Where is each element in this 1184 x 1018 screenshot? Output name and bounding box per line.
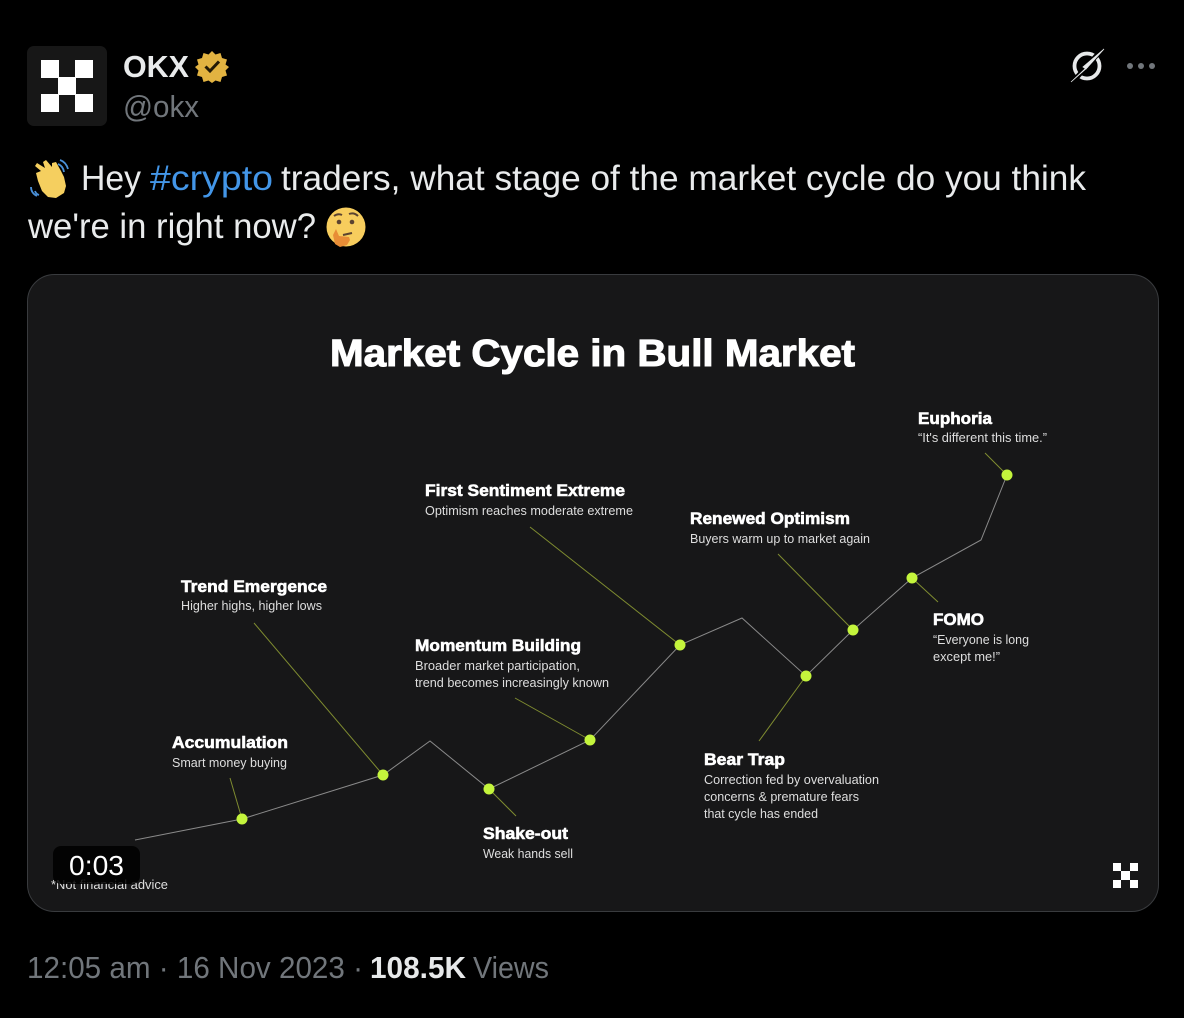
post metadata: 108.5K	[370, 950, 467, 985]
label: Euphoria: “It's different this time.”	[918, 431, 1047, 445]
label: FOMO: except me!”	[933, 650, 1000, 664]
video timer	[53, 846, 140, 884]
disclaimer: *Not financial advice	[51, 878, 168, 892]
line chart: market cycle	[135, 453, 1012, 840]
video timer: 0:03	[69, 850, 124, 881]
label: Renewed Optimism	[690, 509, 870, 546]
account name: OKX	[123, 49, 189, 84]
post text: #crypto	[150, 159, 273, 198]
label: Accumulation: Accumulation	[172, 733, 288, 752]
video panel	[28, 274, 1158, 912]
post text: traders, what stage of the market cycle do you think	[281, 159, 1086, 198]
icon: gold verified badge	[195, 51, 229, 83]
post metadata: 12:05 am · 16 Nov 2023 ·	[27, 950, 363, 985]
label: Bear Trap: Bear Trap	[704, 750, 785, 769]
post text	[27, 159, 1086, 247]
label: Bear Trap: concerns & premature fears	[704, 790, 859, 804]
label: FOMO: FOMO	[933, 610, 984, 629]
data points	[236, 470, 1012, 824]
label: Shake-out	[483, 824, 573, 861]
label: Shake-out: Shake-out	[483, 824, 568, 843]
title: Market Cycle in Bull Market	[330, 333, 855, 375]
label: FOMO: “Everyone is long	[933, 633, 1029, 647]
label: Euphoria	[918, 409, 1047, 445]
label: Momentum Building: Broader market participation,	[415, 659, 580, 673]
leader lines	[230, 453, 1007, 819]
label: Bear Trap: that cycle has ended	[704, 807, 818, 821]
label: Momentum Building: Momentum Building	[415, 636, 581, 655]
icon: OKX watermark	[1113, 863, 1138, 888]
icon: waving hand emoji	[31, 160, 68, 198]
icon: more menu	[1127, 63, 1155, 69]
label: Euphoria: Euphoria	[918, 409, 993, 428]
label: Trend Emergence	[181, 577, 327, 613]
label: First Sentiment Extreme: First Sentiment Extreme	[425, 481, 625, 500]
label: Renewed Optimism: Buyers warm up to market again	[690, 532, 870, 546]
label: Bear Trap	[704, 750, 879, 821]
label: Accumulation	[172, 733, 288, 770]
post metadata: Views	[473, 950, 549, 985]
post metadata	[27, 950, 549, 985]
post text: we're in right now?	[27, 207, 316, 246]
label: Trend Emergence: Higher highs, higher lows	[181, 599, 322, 613]
label: Trend Emergence: Trend Emergence	[181, 577, 327, 596]
label: Bear Trap: Correction fed by overvaluation	[704, 773, 879, 787]
label: Renewed Optimism: Renewed Optimism	[690, 509, 850, 528]
label: FOMO	[933, 610, 1029, 664]
icon: compass	[1070, 46, 1105, 85]
label: Momentum Building: trend becomes increasingly known	[415, 676, 609, 690]
post text: Hey	[81, 159, 141, 198]
label: First Sentiment Extreme: Optimism reaches moderate extreme	[425, 504, 633, 518]
label: Shake-out: Weak hands sell	[483, 847, 573, 861]
label: First Sentiment Extreme	[425, 481, 633, 518]
icon: thinking face emoji	[326, 208, 366, 247]
label: Accumulation: Smart money buying	[172, 756, 287, 770]
avatar: OKX logo	[27, 46, 107, 126]
handle: @okx	[123, 89, 199, 124]
label: Momentum Building	[415, 636, 609, 690]
